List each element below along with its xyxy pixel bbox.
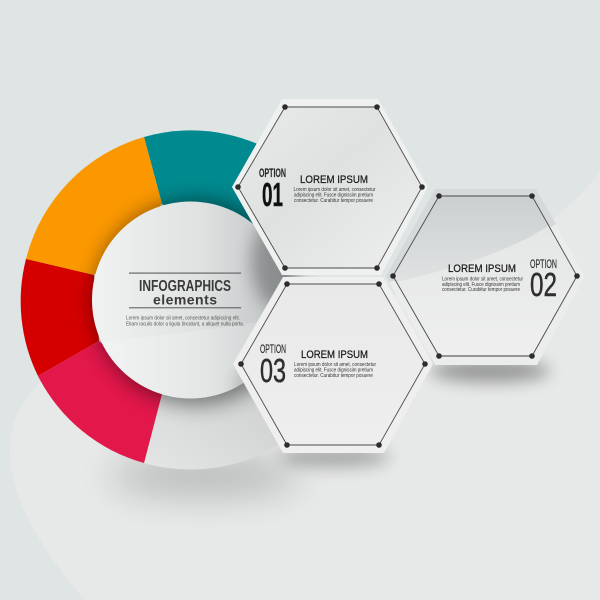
hexagon 01 body: adipiscing elit. Fusce dignissim pretium [294,192,373,198]
hexagon 03 body: consectetur. Curabitur tempor posuere [294,373,373,379]
heading: infographics: INFOGRAPHICS [139,278,231,295]
hexagon 02 number: 02 [530,266,557,303]
hexagon 02 [386,189,585,365]
segment: red [21,259,99,376]
centre circle shadow [93,199,299,405]
hexagon 03 number: 03 [260,352,286,389]
hexagon 01 option: OPTION [259,168,286,180]
centre circle [92,202,282,398]
donut chart [21,130,320,470]
caption: Lorem ipsum dolor sit amet, consectetur adipiscing elit. [126,316,240,322]
hexagon 02 body: Lorem ipsum dolor sit amet, consectetur [442,276,523,282]
centre circle: Etiam iaculis dolor a ligula tincidunt, a aliquet nulla porta. [126,322,244,328]
donut shadow [110,456,300,496]
background swoosh [10,172,600,600]
hexagon 01 [232,99,428,275]
hexagon 02 body: consectetur. Curabitur tempor posuere [442,287,520,293]
hexagon 02 body: adipiscing elit. Fusce dignissim pretium [442,282,520,288]
hexagon 02 body [442,276,523,293]
segment: crimson [38,341,162,463]
heading: elements: elements [153,292,217,308]
heading rule top [129,272,241,274]
segment: teal [144,130,300,250]
hexagon shadows [280,360,550,467]
hexagon 01 body: consectetur. Curabitur tempor posuere [294,198,373,204]
hexagon 03 option: OPTION [260,344,286,356]
hexagon 02 option: OPTION [530,259,557,271]
hexagon 01 number: 01 [262,176,283,213]
hexagon 01 body: Lorem ipsum dolor sit amet, consectetur [294,187,376,193]
hexagon 01 title: LOREM IPSUM [300,174,368,186]
hexagon 01 body [294,187,376,204]
hexagon 03 body: Lorem ipsum dolor sit amet, consectetur [294,362,376,368]
hexagon 03 [233,277,433,453]
hexagon 03 body [294,362,376,379]
segment: orange [26,137,162,275]
heading rule bottom [129,307,241,308]
hexagon 02 title: LOREM IPSUM [448,263,516,275]
hexagon 03 title: LOREM IPSUM [301,349,368,361]
segment: grey [144,340,320,470]
hexagon 03 body: adipiscing elit. Fusce dignissim pretium [294,368,373,374]
